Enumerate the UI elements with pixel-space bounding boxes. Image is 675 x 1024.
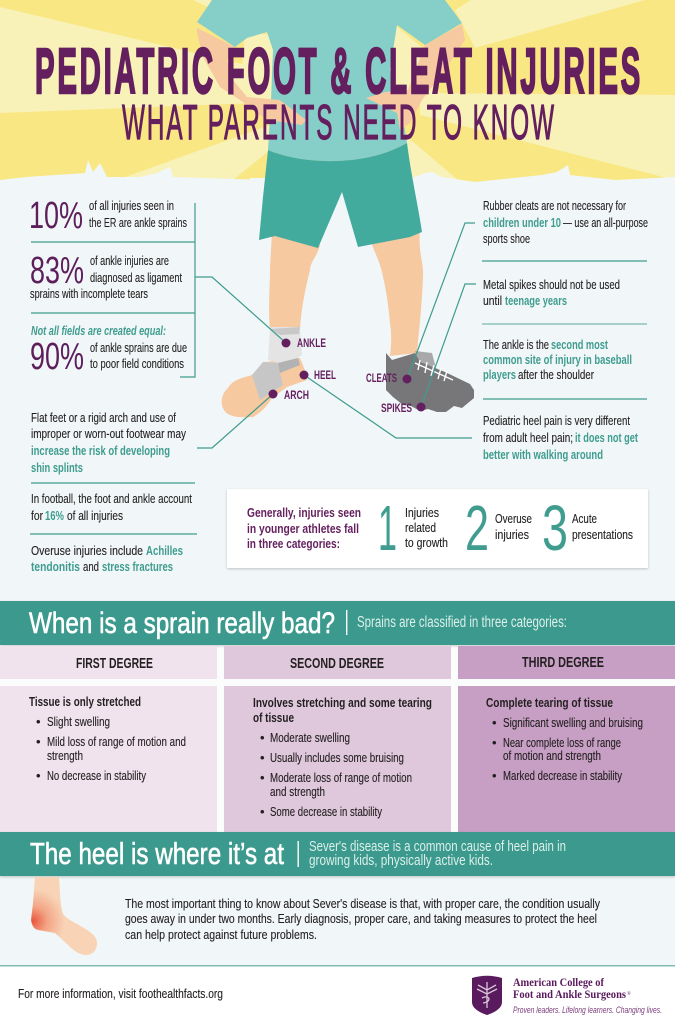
stat: 83%: sprains with incomplete tears [30, 286, 148, 301]
panel: third degree [458, 646, 675, 832]
logo: text: ® [627, 991, 631, 997]
ankle bandage [252, 327, 302, 400]
panel: three categories: 2 [465, 492, 489, 564]
stat: 83%: 83% [30, 250, 84, 292]
panel: first degree: Slight swelling [47, 714, 110, 729]
panel: third degree: Complete tearing of tissue [486, 695, 613, 710]
panel: three categories: Acute [572, 511, 597, 526]
logo: text [513, 977, 662, 1016]
banner: when is a sprain really bad [0, 601, 675, 645]
text: metal spikes: until [483, 293, 502, 308]
shorts [259, 143, 422, 248]
text: rubber cleats: sports shoe [483, 231, 530, 246]
text: metal spikes [483, 277, 620, 308]
text: overuse: Overuse injuries include [31, 543, 143, 558]
panel: first degree: • [36, 768, 41, 783]
text: flat feet: Flat feet or a rigid arch and use of [31, 410, 176, 425]
marker: ankle [282, 336, 326, 350]
panel: second degree: Usually includes some bruising [270, 750, 404, 765]
panel: second degree: Moderate loss of range of motion [270, 770, 412, 785]
panel: third degree: Near complete loss of range [503, 735, 621, 750]
logo: text: Foot and Ankle Surgeons [513, 989, 626, 1001]
panel: third degree: • [492, 768, 497, 783]
panel: three categories: presentations [572, 527, 633, 542]
panel: second degree: Moderate swelling [270, 730, 350, 745]
panel: three categories: to growth [405, 535, 448, 550]
text: rubber cleats: children under 10 [483, 215, 561, 230]
marker: heel: HEEL [314, 368, 336, 382]
text: football: for [31, 508, 44, 523]
panel: first degree: Tissue is only stretched [29, 694, 141, 709]
panel: third degree: Marked decrease in stability [503, 768, 622, 783]
text: metal spikes: teenage years [505, 293, 567, 308]
connector lines [30, 203, 647, 534]
text: overuse [31, 543, 183, 574]
stat: 83%: of ankle injuries are [90, 253, 169, 268]
panel: degree table background [0, 645, 675, 833]
panel: second degree: • [260, 750, 265, 765]
left leg [269, 232, 320, 330]
footer [0, 965, 675, 1024]
logo: shield [472, 976, 502, 1015]
stat: 90%: 90% [30, 336, 84, 378]
text: rubber cleats [483, 198, 648, 246]
text: football: In football, the foot and ankle account [31, 491, 192, 506]
stat: 10%: of all injuries seen in [89, 198, 174, 213]
marker: arch [268, 388, 309, 402]
text: severs disease [125, 896, 600, 942]
text: heel pain: from adult heel pain; [483, 430, 573, 445]
stat: 90%: Not all fields are created equal: [31, 323, 166, 338]
panel: first degree: No decrease in stability [47, 768, 146, 783]
panel: first degree: • [36, 734, 41, 749]
stat: 90%: to poor field conditions [90, 356, 184, 371]
text: flat feet: increase the risk of developing [31, 443, 170, 458]
stat: 90% [30, 323, 187, 378]
panel: three categories: in younger athletes fall [247, 521, 359, 536]
text: ankle site: second most [551, 337, 608, 352]
text: football [31, 491, 192, 523]
banner: when is a sprain really bad: When is a sprain really bad? [29, 607, 335, 640]
panel: second degree: • [260, 770, 265, 785]
cleat shoe [386, 351, 474, 412]
text: ankle site: The ankle is the [483, 337, 549, 352]
icon: foot with red heel [31, 877, 97, 955]
left arm [197, 28, 306, 125]
text: ankle site: players [483, 367, 516, 382]
banner: the heel is where it's at: Sever's disease is a common cause of heel pain in [309, 838, 566, 855]
text: overuse: and [83, 559, 99, 574]
panel: third degree: • [492, 735, 497, 750]
banner: when is a sprain really bad: Sprains are classified in three categories: [357, 614, 567, 631]
panel: second degree: • [260, 730, 265, 745]
panel: three categories: Injuries [405, 505, 439, 520]
panel: first degree: strength [47, 748, 83, 763]
panel: second degree: of tissue [253, 710, 294, 725]
stat: 90%: of ankle sprains are due [90, 340, 187, 355]
panel: second degree: SECOND DEGREE [290, 655, 384, 672]
panel: first degree: Mild loss of range of motion and [47, 734, 186, 749]
stat: 10% [29, 195, 187, 237]
stat: 10%: 10% [29, 195, 83, 237]
body part markers [268, 336, 426, 415]
text: overuse: tendonitis [31, 559, 80, 574]
banner: the heel is where it's at: The heel is where it’s at [30, 836, 284, 871]
right arm [366, 24, 465, 130]
text: football: 16% [45, 508, 64, 523]
stat: 10%: the ER are ankle sprains [89, 215, 187, 230]
marker: heel [300, 368, 336, 382]
panel: second degree: and strength [270, 784, 325, 799]
shirt [197, 0, 462, 161]
panel: three categories [227, 489, 648, 568]
panel: third degree: THIRD DEGREE [522, 654, 604, 671]
marker: spikes: SPIKES [381, 401, 412, 415]
logo: text: American College of [513, 977, 604, 989]
panel: three categories: related [405, 520, 436, 535]
banner: the heel is where it's at [0, 832, 675, 876]
bare foot [222, 358, 307, 417]
marker: arch: ARCH [284, 388, 309, 402]
panel: third degree: • [492, 715, 497, 730]
text: heel pain: it does not get [575, 430, 638, 445]
marker: ankle: ANKLE [297, 336, 326, 350]
header sunburst background [0, 0, 675, 200]
panel: second degree [224, 646, 451, 832]
panel: three categories: Overuse [495, 511, 532, 526]
panel: second degree: • [260, 804, 265, 819]
stat: 83% [30, 250, 182, 301]
footer link text: For more information, visit foothealthfacts.org [18, 986, 223, 1001]
panel: third degree: of motion and strength [503, 748, 601, 763]
text: flat feet [31, 410, 186, 475]
panel: first degree: • [36, 714, 41, 729]
panel: three categories: 1 [378, 492, 397, 564]
panel: second degree: Involves stretching and some tearing [253, 695, 432, 710]
stat: 83%: diagnosed as ligament [90, 270, 182, 285]
panel: first degree [0, 646, 217, 832]
text: ankle site [483, 337, 632, 382]
text: severs disease: can help protect against future problems. [125, 927, 317, 942]
right leg [372, 228, 423, 356]
panel: three categories: Generally, injuries seen [247, 505, 361, 520]
text: flat feet: improper or worn-out footwear may [31, 426, 186, 441]
panel: three categories: 3 [542, 492, 568, 564]
text: heel pain [483, 413, 638, 462]
text: flat feet: shin splints [31, 460, 83, 475]
marker: cleats: CLEATS [366, 371, 397, 385]
text: heel pain: better with walking around [483, 447, 603, 462]
text: overuse: stress fractures [102, 559, 173, 574]
text: overuse: Achilles [146, 543, 183, 558]
banner: the heel is where it's at: growing kids, physically active kids. [309, 852, 493, 869]
illustration: child figure [197, 0, 474, 417]
panel: three categories: injuries [495, 527, 529, 542]
text: football: of all injuries [67, 508, 123, 523]
text: ankle site: after the shoulder [518, 367, 594, 382]
text: metal spikes: Metal spikes should not be used [483, 277, 620, 292]
panel: first degree: FIRST DEGREE [76, 655, 153, 672]
panel: three categories: in three categories: [247, 536, 340, 551]
panel: second degree: Some decrease in stability [270, 804, 382, 819]
